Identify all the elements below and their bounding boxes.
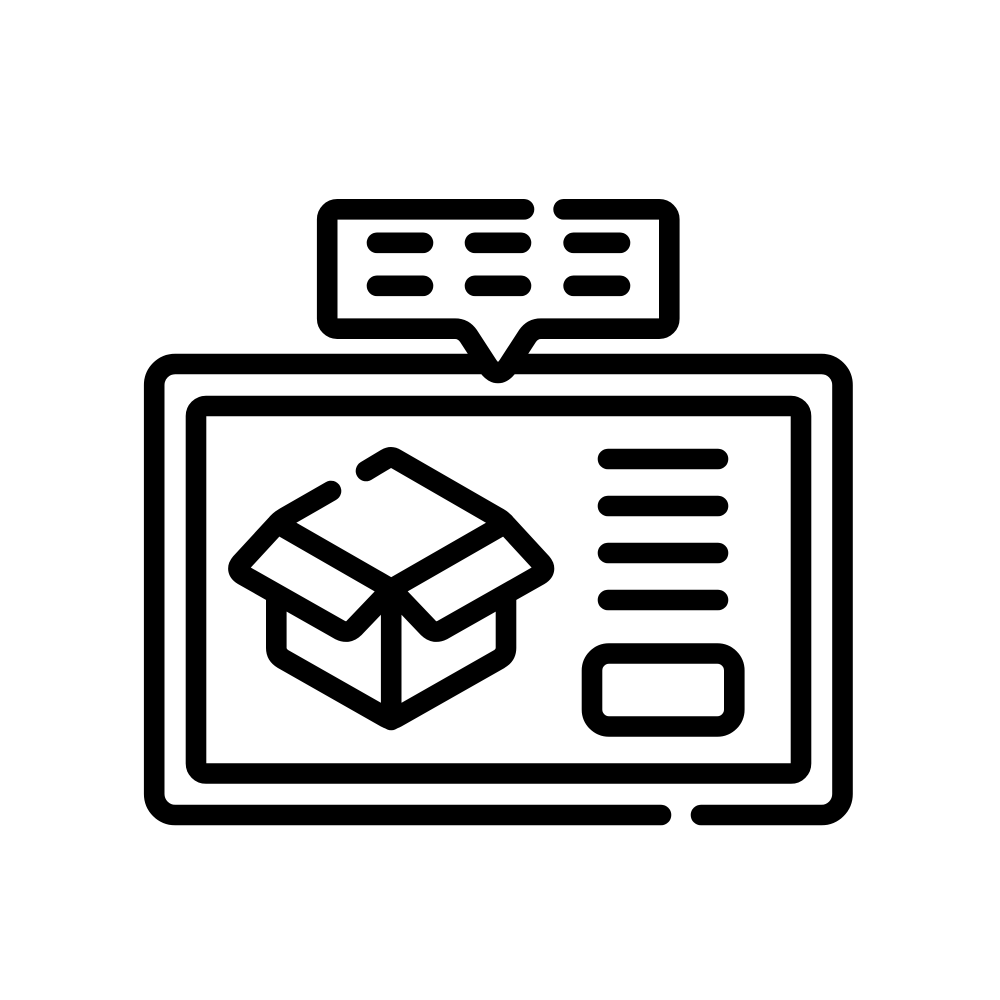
bubble text lines [377, 243, 620, 286]
button [592, 654, 734, 726]
icon: inner screen [196, 406, 801, 774]
icon: outer tablet frame [154, 364, 842, 815]
text lines [608, 459, 718, 600]
icon: speech bubble [327, 209, 669, 373]
icon: open box [238, 458, 544, 720]
